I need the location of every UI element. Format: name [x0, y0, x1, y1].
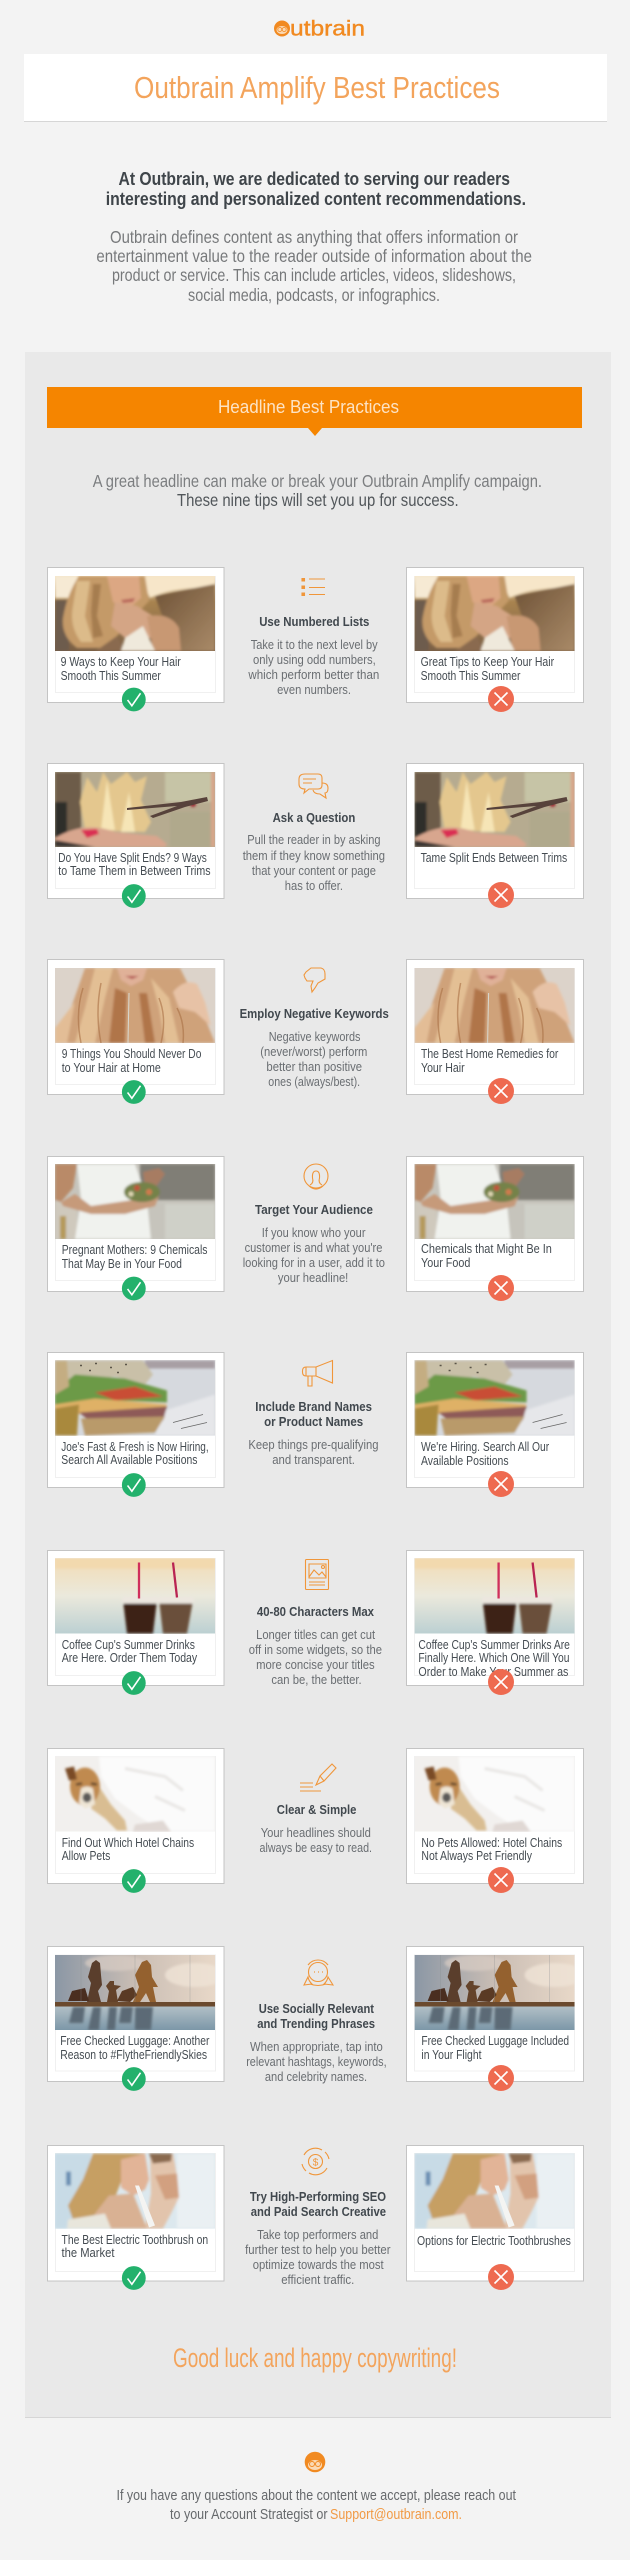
- good example card: [48, 568, 224, 711]
- icon: person in circle: [304, 1164, 328, 1189]
- good example card: to Your Hair at Home: [62, 1061, 161, 1075]
- tip text: and celebrity names.: [265, 2070, 367, 2084]
- good example card: Joe's Fast & Fresh is Now Hiring,: [61, 1440, 209, 1454]
- good example card: [48, 764, 224, 908]
- tip text: [246, 2002, 387, 2084]
- tip text: Longer titles can get cut: [256, 1628, 376, 1642]
- tip text: [248, 1400, 379, 1467]
- good example card: Pregnant Mothers: 9 Chemicals: [62, 1243, 208, 1257]
- icon: trending speech bubble: [304, 1960, 333, 1986]
- tip text: relevant hashtags, keywords,: [246, 2055, 387, 2069]
- tip 1: use numbered lists: [48, 568, 584, 712]
- good example card: [48, 2146, 224, 2290]
- good example card: Allow Pets: [62, 1849, 110, 1863]
- tip text: has to offer.: [285, 879, 343, 893]
- footer text: [116, 2488, 516, 2523]
- bad example card: [406, 960, 584, 1104]
- footer icon: outbrain mascot: [305, 2452, 325, 2472]
- tip text: Your headlines should: [261, 1826, 371, 1840]
- good example card: the Market: [62, 2246, 115, 2260]
- tip text: or Product Names: [264, 1415, 363, 1429]
- tip text: [247, 615, 379, 697]
- tip text: and Paid Search Creative: [251, 2205, 386, 2219]
- bad example card: Available Positions: [421, 1454, 509, 1468]
- tip text: which perform better than: [247, 668, 379, 682]
- title card: [24, 54, 607, 122]
- bad example card: Tame Split Ends Between Trims: [421, 851, 567, 865]
- bad example card: Coffee Cup's Summer Drinks Are: [418, 1638, 570, 1652]
- good example card: Smooth This Summer: [61, 669, 161, 683]
- intro bold statement: interesting and personalized content recommendations.: [106, 189, 526, 209]
- bad example card: We're Hiring. Search All Our: [421, 1440, 549, 1454]
- tip text: [243, 1203, 385, 1285]
- tip text: that your content or page: [252, 864, 376, 878]
- intro paragraph: Outbrain defines content as anything that offers information or: [110, 227, 518, 247]
- tip text: always be easy to read.: [260, 1841, 372, 1855]
- bad example card: Great Tips to Keep Your Hair: [421, 655, 554, 669]
- panel: headline best practices: [25, 352, 611, 2418]
- tip text: [249, 1605, 382, 1687]
- tip text: efficient traffic.: [281, 2273, 354, 2287]
- icon: megaphone: [302, 1360, 332, 1386]
- good example card: 9 Things You Should Never Do: [62, 1047, 201, 1061]
- bad example card: The Best Home Remedies for: [421, 1047, 558, 1061]
- footer text: Support@outbrain.com.: [330, 2507, 462, 2523]
- tip text: and Trending Phrases: [257, 2017, 375, 2031]
- good example card: Search All Available Positions: [61, 1453, 197, 1467]
- good example card: Free Checked Luggage: Another: [60, 2034, 209, 2048]
- good example card: [48, 1550, 224, 1695]
- tip text: Target Your Audience: [255, 1203, 373, 1217]
- tip 2: ask a question: [48, 764, 584, 908]
- bad example card: Finally Here. Which One Will You: [418, 1651, 570, 1665]
- tip text: more concise your titles: [256, 1658, 375, 1672]
- bad example card: Your Food: [421, 1256, 470, 1270]
- icon: dollar with arrows: $: [313, 2158, 319, 2168]
- tip text: better than positive: [266, 1060, 362, 1074]
- bad example card: Chemicals that Might Be In: [421, 1242, 552, 1256]
- section intro: [93, 471, 542, 510]
- tip text: Keep things pre-qualifying: [248, 1438, 379, 1452]
- icon: thumbs down: [304, 968, 325, 992]
- tip text: optimize towards the most: [253, 2258, 384, 2272]
- bad example card: [406, 764, 584, 908]
- tip text: ones (always/best).: [268, 1075, 360, 1089]
- good example card: Find Out Which Hotel Chains: [62, 1836, 194, 1850]
- good example card: [48, 1156, 224, 1300]
- intro bold statement: [106, 169, 526, 209]
- intro paragraph: social media, podcasts, or infographics.: [188, 285, 440, 305]
- title card: Outbrain Amplify Best Practices: [134, 70, 500, 105]
- intro paragraph: [96, 227, 532, 305]
- bad example card: [406, 1946, 585, 2091]
- tip text: off in some widgets, so the: [249, 1643, 382, 1657]
- section intro: These nine tips will set you up for success.: [177, 490, 459, 510]
- tip text: (never/worst) perform: [260, 1045, 367, 1059]
- bad example card: [406, 2146, 584, 2290]
- tip text: Include Brand Names: [255, 1400, 372, 1414]
- tip text: Use Numbered Lists: [259, 615, 369, 629]
- tip text: Try High-Performing SEO: [250, 2190, 386, 2204]
- good example card: to Tame Them in Between Trims: [58, 864, 211, 878]
- good example card: 9 Ways to Keep Your Hair: [61, 655, 181, 669]
- good example card: [48, 960, 224, 1104]
- good example card: Are Here. Order Them Today: [62, 1651, 198, 1665]
- tip text: [240, 1007, 389, 1089]
- intro bold statement: At Outbrain, we are dedicated to serving our readers: [118, 169, 510, 189]
- bad example card: No Pets Allowed: Hotel Chains: [421, 1836, 562, 1850]
- tip text: further test to help you better: [245, 2243, 390, 2257]
- tip text: even numbers.: [277, 683, 351, 697]
- good example card: [48, 1352, 224, 1497]
- good example card: The Best Electric Toothbrush on: [62, 2233, 208, 2247]
- bad example card: Options for Electric Toothbrushes: [417, 2234, 571, 2248]
- tip text: looking for in a user, add it to: [243, 1256, 385, 1270]
- good example card: That May Be in Your Food: [62, 1257, 182, 1271]
- tip text: Take it to the next level by: [251, 638, 378, 652]
- icon: speech bubbles: [299, 774, 328, 798]
- tip text: customer is and what you're: [245, 1241, 382, 1255]
- tip 7: clear and simple: [48, 1748, 584, 1893]
- section banner: [47, 387, 582, 436]
- tip text: Use Socially Relevant: [259, 2002, 375, 2016]
- tip text: [243, 811, 385, 893]
- tip text: [245, 2190, 390, 2287]
- bad example card: Order to Make Your Summer as: [418, 1665, 568, 1679]
- tip 3: employ negative keywords: [48, 960, 584, 1104]
- tip 4: target your audience: [48, 1156, 584, 1301]
- tip 6: 40-80 characters max: [48, 1550, 584, 1695]
- good example card: [48, 1748, 224, 1893]
- tip text: and transparent.: [272, 1453, 355, 1467]
- intro paragraph: entertainment value to the reader outside of information about the: [96, 246, 532, 266]
- tip text: Clear & Simple: [277, 1803, 356, 1817]
- tip text: [260, 1803, 372, 1855]
- tip text: your headline!: [278, 1271, 348, 1285]
- bad example card: [406, 1748, 584, 1893]
- logo: utbrain: [290, 18, 365, 40]
- footer text: If you have any questions about the content we accept, please reach out: [116, 2488, 516, 2504]
- icon: pencil writing lines: [300, 1764, 336, 1791]
- bad example card: Your Hair: [421, 1061, 465, 1075]
- tip text: Negative keywords: [269, 1030, 360, 1044]
- tip text: When appropriate, tap into: [250, 2040, 383, 2054]
- tip text: only using odd numbers,: [253, 653, 376, 667]
- bad example card: Smooth This Summer: [421, 669, 520, 683]
- section intro: A great headline can make or break your Outbrain Amplify campaign.: [93, 471, 542, 491]
- good example card: Coffee Cup's Summer Drinks: [62, 1638, 195, 1652]
- good example card: Reason to #FlytheFriendlySkies: [60, 2048, 207, 2062]
- tip text: Take top performers and: [257, 2228, 378, 2242]
- footer text: to your Account Strategist or: [170, 2507, 328, 2523]
- bad example card: in Your Flight: [421, 2048, 482, 2062]
- tip text: them if they know something: [243, 849, 385, 863]
- tip text: Employ Negative Keywords: [240, 1007, 389, 1021]
- tip 9: high-performing seo and paid search: [48, 2146, 584, 2290]
- closing message: Good luck and happy copywriting!: [173, 2343, 457, 2373]
- tip text: can be, the better.: [271, 1673, 362, 1687]
- tip 5: include brand names: [48, 1352, 584, 1497]
- tip text: If you know who your: [262, 1226, 366, 1240]
- tip text: Ask a Question: [273, 811, 355, 825]
- bad example card: [406, 568, 584, 712]
- icon: numbered list: [302, 578, 325, 596]
- good example card: [48, 1946, 225, 2091]
- good example card: Do You Have Split Ends? 9 Ways: [58, 851, 207, 865]
- tip text: Pull the reader in by asking: [247, 833, 381, 847]
- bad example card: [406, 1156, 584, 1301]
- tip 8: socially relevant phrases: [48, 1946, 585, 2091]
- bad example card: Free Checked Luggage Included: [421, 2034, 569, 2048]
- bad example card: [406, 1550, 584, 1695]
- bad example card: [406, 1352, 584, 1497]
- tip text: 40-80 Characters Max: [257, 1605, 374, 1619]
- icon: dollar with arrows: [302, 2148, 329, 2175]
- bad example card: Not Always Pet Friendly: [421, 1849, 533, 1863]
- intro paragraph: product or service. This can include articles, videos, slideshows,: [112, 265, 516, 285]
- section banner: Headline Best Practices: [218, 396, 399, 417]
- icon: article page: [306, 1560, 328, 1590]
